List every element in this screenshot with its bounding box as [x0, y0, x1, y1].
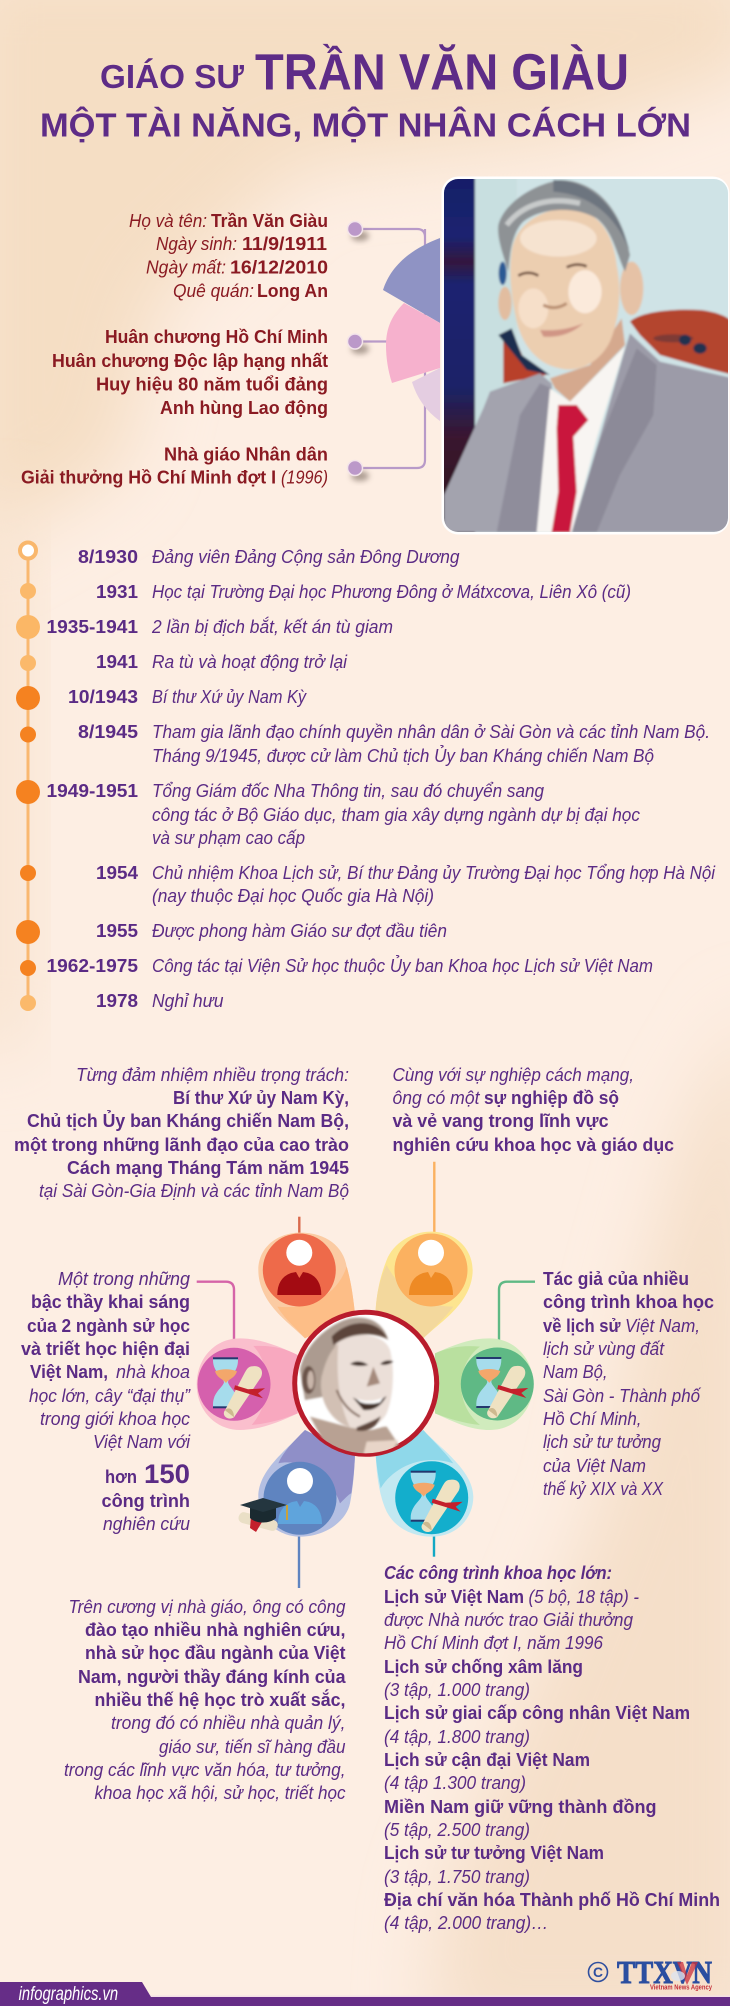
- text: scholar pioneer: Việt Nam,: [30, 1361, 108, 1382]
- title: TRẦN VĂN GIÀU: [255, 42, 629, 100]
- text: major scientific works: Miền Nam giữ vững thành đồng: [384, 1796, 656, 1817]
- text: research career: [392, 1064, 674, 1155]
- honours: Giải thưởng Hồ Chí Minh đợt I: [21, 466, 276, 488]
- timeline years: [46, 546, 139, 1011]
- petal: top right: [376, 1232, 473, 1338]
- footer source label: infographics.vn: [19, 1984, 118, 2005]
- text: author of history works: lịch sử tư tưởng: [543, 1431, 662, 1452]
- text: teacher role: Nam, người thầy đáng kính của: [78, 1666, 346, 1687]
- biography details: Quê quán:: [173, 280, 254, 301]
- text: revolutionary roles: Cách mạng Tháng Tám năm 1945: [67, 1157, 349, 1178]
- info marker dots: [348, 222, 369, 481]
- text: author of history works: về lịch sử: [543, 1315, 621, 1336]
- text: teacher role: trong đó có nhiều nhà quản lý,: [111, 1712, 346, 1733]
- footer bar: [0, 1982, 730, 2006]
- timeline descriptions: và sư phạm cao cấp: [152, 827, 305, 848]
- petal: top left: [258, 1233, 355, 1338]
- text: research career: và vẻ vang trong lĩnh vực: [392, 1110, 608, 1131]
- text: research career: ông có một: [392, 1087, 480, 1108]
- text: scholar pioneer: nhà khoa: [116, 1361, 190, 1382]
- biography details: Ngày mất:: [146, 256, 226, 278]
- text: scholar pioneer: hơn: [105, 1466, 137, 1487]
- text: revolutionary roles: Bí thư Xứ ủy Nam Kỳ,: [173, 1087, 349, 1108]
- petal: left: [197, 1338, 298, 1430]
- awards: Huân chương Hồ Chí Minh: [105, 326, 328, 347]
- timeline descriptions: (nay thuộc Đại học Quốc gia Hà Nội): [152, 885, 434, 906]
- timeline descriptions: Tháng 9/1945, được cử làm Chủ tịch Ủy ban Kháng chiến Nam Bộ: [152, 745, 654, 766]
- text: teacher role: đào tạo nhiều nhà nghiên cứu,: [85, 1619, 346, 1640]
- text: major scientific works: Địa chí văn hóa Thành phố Hồ Chí Minh: [384, 1889, 720, 1910]
- text: major scientific works: (5 bộ, 18 tập) -: [528, 1586, 639, 1607]
- timeline years: 8/1930: [78, 546, 138, 567]
- text: author of history works: Nam Bộ,: [543, 1361, 608, 1382]
- text: teacher role: Trên cương vị nhà giáo, ông có công: [68, 1596, 346, 1617]
- timeline years: 1954: [96, 862, 139, 883]
- text: research career: nghiên cứu khoa học và giáo dục: [392, 1134, 674, 1155]
- timeline descriptions: Công tác tại Viện Sử học thuộc Ủy ban Khoa học Lịch sử Việt Nam: [152, 955, 653, 976]
- text: revolutionary roles: tại Sài Gòn-Gia Định và các tỉnh Nam Bộ: [39, 1180, 349, 1201]
- text: major scientific works: Lịch sử tư tưởng Việt Nam: [384, 1842, 604, 1863]
- awards: [52, 326, 328, 418]
- logo: TTXVN: TTXVN: [617, 1954, 712, 1990]
- timeline descriptions: 2 lần bị địch bắt, kết án tù giam: [151, 616, 393, 637]
- text: major scientific works: (4 tập, 2.000 trang)…: [384, 1912, 548, 1933]
- biography details: [129, 210, 328, 301]
- text: author of history works: Hồ Chí Minh,: [543, 1408, 642, 1429]
- honours: Nhà giáo Nhân dân: [164, 444, 328, 464]
- fan wedges and connectors: [355, 229, 440, 468]
- biography details: Long An: [257, 280, 328, 301]
- text: scholar pioneer: công trình: [102, 1490, 190, 1511]
- timeline descriptions: Được phong hàm Giáo sư đợt đầu tiên: [152, 920, 447, 941]
- text: author of history works: Sài Gòn - Thành phố: [543, 1385, 702, 1406]
- biography details: 11/9/1911: [242, 233, 327, 254]
- timeline descriptions: Nghỉ hưu: [152, 990, 224, 1011]
- flower diagram connectors: [197, 1162, 535, 1588]
- timeline descriptions: Ra tù và hoạt động trở lại: [152, 651, 348, 672]
- text: author of history works: của Việt Nam: [543, 1455, 646, 1476]
- text: major scientific works: được Nhà nước trao Giải thưởng: [384, 1609, 634, 1630]
- timeline years: 1935-1941: [46, 616, 138, 637]
- text: major scientific works: (4 tập, 1.800 trang): [384, 1726, 530, 1747]
- biography details: Trần Văn Giàu: [211, 210, 328, 231]
- text: major scientific works: Các công trình khoa học lớn:: [384, 1562, 612, 1583]
- petal: bottom right: [376, 1430, 473, 1537]
- timeline descriptions: Tổng Giám đốc Nha Thông tin, sau đó chuyển sang: [152, 780, 545, 801]
- awards: Huy hiệu 80 năm tuổi đảng: [96, 374, 328, 394]
- text: major scientific works: Lịch sử Việt Nam: [384, 1586, 524, 1607]
- biography details: 16/12/2010: [230, 256, 328, 278]
- text: revolutionary roles: Chủ tịch Ủy ban Kháng chiến Nam Bộ,: [27, 1110, 349, 1131]
- text: teacher role: khoa học xã hội, sử học, triết học: [94, 1782, 346, 1803]
- title: [40, 42, 691, 145]
- text: revolutionary roles: [14, 1064, 349, 1201]
- text: author of history works: Việt Nam,: [625, 1315, 700, 1336]
- text: major scientific works: (3 tập, 1.750 trang): [384, 1866, 530, 1887]
- text: major scientific works: Lịch sử giai cấp công nhân Việt Nam: [384, 1702, 690, 1723]
- text: author of history works: thế kỷ XIX và XX: [543, 1478, 664, 1499]
- text: major scientific works: (3 tập, 1.000 trang): [384, 1679, 530, 1700]
- timeline descriptions: Học tại Trường Đại học Phương Đông ở Mátxcơva, Liên Xô (cũ): [152, 581, 631, 602]
- text: author of history works: lịch sử vùng đất: [543, 1338, 665, 1359]
- text: major scientific works: (5 tập, 2.500 trang): [384, 1819, 530, 1840]
- timeline descriptions: công tác ở Bộ Giáo dục, tham gia xây dựng ngành dự bị đại học: [152, 804, 641, 825]
- text: major scientific works: (4 tập 1.300 trang): [384, 1772, 526, 1793]
- text: major scientific works: [384, 1562, 720, 1933]
- text: teacher role: giáo sư, tiến sĩ hàng đầu: [159, 1736, 346, 1757]
- timeline years: 8/1945: [78, 721, 138, 742]
- timeline years: 1941: [96, 651, 138, 672]
- text: research career: Cùng với sự nghiệp cách mạng,: [392, 1064, 634, 1085]
- timeline years: 1949-1951: [46, 780, 138, 801]
- text: scholar pioneer: và triết học hiện đại: [21, 1338, 190, 1359]
- central portrait: [295, 1312, 437, 1458]
- text: teacher role: trong các lĩnh vực văn hóa, tư tưởng,: [64, 1759, 346, 1780]
- petal: bottom left: [258, 1430, 355, 1537]
- timeline start ring: [20, 542, 36, 558]
- text: author of history works: [543, 1268, 714, 1499]
- timeline descriptions: Bí thư Xứ ủy Nam Kỳ: [152, 686, 308, 707]
- text: revolutionary roles: một trong những lãnh đạo của cao trào: [14, 1134, 349, 1155]
- text: teacher role: nhà sử học đầu ngành của Việt: [85, 1642, 346, 1663]
- text: scholar pioneer: nghiên cứu: [103, 1513, 190, 1534]
- title: GIÁO SƯ: [100, 58, 244, 96]
- text: scholar pioneer: bậc thầy khai sáng: [31, 1291, 190, 1312]
- text: scholar pioneer: của 2 ngành sử học: [27, 1315, 190, 1336]
- text: teacher role: [64, 1596, 346, 1803]
- text: author of history works: công trình khoa học: [543, 1291, 714, 1312]
- logo: TTXVN: C: [593, 1964, 603, 1980]
- petal: right: [435, 1338, 534, 1430]
- timeline axis: [16, 542, 40, 1011]
- text: revolutionary roles: Từng đảm nhiệm nhiều trọng trách:: [76, 1064, 349, 1085]
- text: major scientific works: Lịch sử cận đại Việt Nam: [384, 1749, 590, 1770]
- text: scholar pioneer: 150: [144, 1459, 190, 1489]
- text: scholar pioneer: học lớn, cây “đại thụ”: [29, 1385, 191, 1406]
- biography details: Họ và tên:: [129, 210, 207, 231]
- portrait photo: [440, 175, 730, 538]
- logo: TTXVN: [588, 1954, 712, 1992]
- timeline descriptions: [151, 546, 716, 1011]
- honours: (1996): [281, 466, 328, 488]
- awards: Anh hùng Lao động: [160, 397, 328, 418]
- text: scholar pioneer: Một trong những: [58, 1268, 191, 1289]
- awards: Huân chương Độc lập hạng nhất: [52, 350, 328, 371]
- text: author of history works: Tác giả của nhiều: [543, 1268, 689, 1289]
- timeline years: 10/1943: [68, 686, 138, 707]
- honours: [21, 444, 328, 488]
- timeline years: 1955: [96, 920, 138, 941]
- text: scholar pioneer: [21, 1268, 191, 1534]
- timeline years: 1978: [96, 990, 138, 1011]
- text: scholar pioneer: Việt Nam với: [93, 1431, 191, 1452]
- text: major scientific works: Lịch sử chống xâm lăng: [384, 1656, 583, 1677]
- title: MỘT TÀI NĂNG, MỘT NHÂN CÁCH LỚN: [40, 106, 691, 145]
- biography details: Ngày sinh:: [156, 233, 237, 254]
- timeline descriptions: Đảng viên Đảng Cộng sản Đông Dương: [152, 546, 460, 567]
- text: research career: sự nghiệp đồ sộ: [484, 1087, 619, 1108]
- text: scholar pioneer: trong giới khoa học: [40, 1408, 191, 1429]
- text: teacher role: nhiều thế hệ học trò xuất sắc,: [94, 1689, 346, 1710]
- timeline years: 1931: [96, 581, 138, 602]
- logo: TTXVN: Vietnam News Agency: [650, 1984, 712, 1992]
- text: major scientific works: Hồ Chí Minh đợt I, năm 1996: [384, 1632, 604, 1653]
- timeline years: 1962-1975: [46, 955, 138, 976]
- icon: graduation cap and diploma: [237, 1498, 287, 1532]
